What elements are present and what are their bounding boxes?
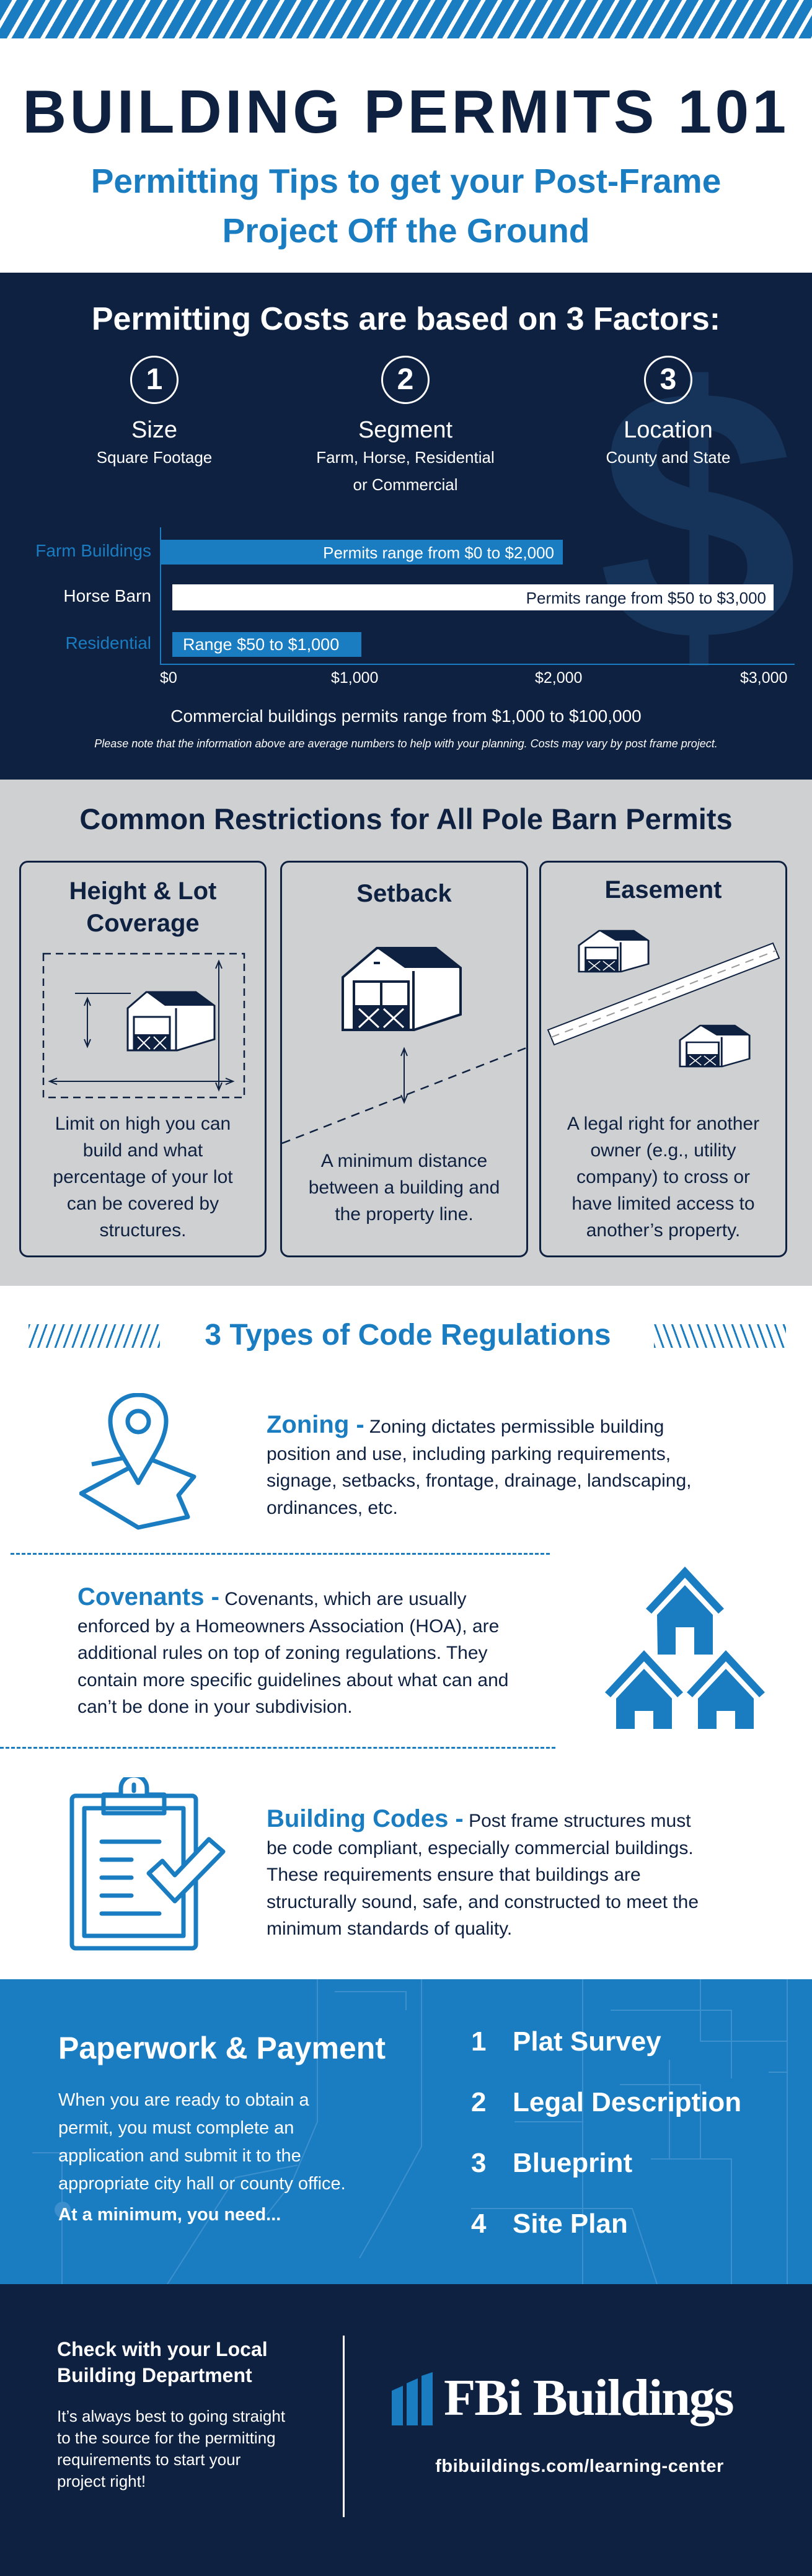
subtitle: Project Off the Ground <box>223 211 589 250</box>
top stripe band <box>0 0 812 38</box>
list: requirements: Site Plan <box>513 2209 628 2239</box>
text: footer description: requirements to start your <box>57 2450 241 2469</box>
card: height & lot coverage: Height & Lot <box>69 877 216 905</box>
bar: residential: Range $50 to $1,000 <box>183 635 339 654</box>
factor 2: segment <box>316 356 495 494</box>
icon: logo bars <box>392 2372 433 2425</box>
text: paperwork description: At a minimum, you need... <box>58 2205 281 2225</box>
item 3 <box>471 2148 632 2178</box>
text: easement description: A legal right for another <box>567 1114 759 1134</box>
text: building codes: structurally sound, safe, and constructed to meet the <box>267 1891 699 1912</box>
text: zoning: Zoning - Zoning dictates permissible building <box>267 1411 664 1438</box>
text: zoning: signage, setbacks, frontage, drainage, landscaping, <box>267 1470 691 1491</box>
text: paperwork description: When you are ready to obtain a <box>58 2090 309 2110</box>
icon: clipboard <box>69 1777 226 1951</box>
text: zoning: ordinances, etc. <box>267 1497 398 1518</box>
bar: horse barn: Permits range from $50 to $3,000 <box>526 589 766 607</box>
url: fbibuildings.com/learning-center <box>435 2456 724 2476</box>
item 3: 3 <box>471 2148 486 2178</box>
icon: easement diagram <box>547 930 780 1067</box>
list: requirements: Plat Survey <box>513 2026 661 2057</box>
list: requirements: Blueprint <box>513 2148 632 2178</box>
text: zoning: position and use, including parking requirements, <box>267 1444 671 1464</box>
heading: check with local department: Check with your Local <box>57 2338 268 2360</box>
text: height description: Limit on high you can <box>55 1114 231 1134</box>
list: requirements <box>471 2026 741 2239</box>
heading: 3 factors: Permitting Costs are based on 3 Factors: <box>92 301 720 337</box>
text: setback description: the property line. <box>335 1204 474 1224</box>
bar chart: $0 <box>160 669 177 687</box>
panel: common restrictions <box>0 780 812 1286</box>
icon: map pin <box>79 1393 196 1529</box>
text: paperwork description <box>58 2090 346 2225</box>
commercial note: Commercial buildings permits range from $1,000 to $100,000 <box>170 706 642 726</box>
text: height description: percentage of your lot <box>53 1167 233 1187</box>
heading: 3 types of code regulations: 3 Types of Code Regulations <box>205 1319 611 1352</box>
bar chart <box>35 527 795 687</box>
text: setback description: between a building and <box>309 1177 500 1198</box>
text: easement description: have limited access to <box>571 1193 755 1214</box>
subtitle <box>91 162 721 250</box>
item 4 <box>471 2209 628 2239</box>
text: building codes: be code compliant, especially commercial buildings. <box>267 1838 694 1858</box>
bar chart: $3,000 <box>740 669 787 687</box>
factor 2: segment: or Commercial <box>353 475 458 494</box>
factor 1: size: 1 <box>146 363 162 396</box>
subtitle: Permitting Tips to get your Post-Frame <box>91 162 721 200</box>
text: footer description: to the source for the permitting <box>57 2429 276 2447</box>
heading: common restrictions: Common Restrictions for All Pole Barn Permits <box>79 802 733 835</box>
factor 3: location <box>606 356 730 467</box>
text: footer description: project right! <box>57 2472 146 2490</box>
text: building codes: These requirements ensure that buildings are <box>267 1865 641 1885</box>
list: requirements: Legal Description <box>513 2087 741 2117</box>
factor 2: segment: Farm, Horse, Residential <box>316 448 495 467</box>
factor 1: size: Square Footage <box>97 448 212 467</box>
item 1 <box>471 2026 661 2057</box>
icon: houses <box>605 1567 765 1729</box>
text: footer description <box>57 2407 285 2490</box>
panel: permitting costs <box>0 273 812 781</box>
bar: farm buildings: Permits range from $0 to $2,000 <box>323 543 554 562</box>
text: covenants: enforced by a Homeowners Association (HOA), are <box>77 1616 499 1636</box>
text: height description <box>53 1114 233 1241</box>
text: zoning <box>267 1411 691 1518</box>
card: height & lot coverage: Coverage <box>86 910 200 937</box>
text: covenants: can’t be done in your subdivision. <box>77 1697 353 1717</box>
text: easement description: owner (e.g., utility <box>590 1140 736 1161</box>
panel: footer <box>0 2284 812 2576</box>
text: easement description: company) to cross or <box>576 1167 750 1187</box>
text: building codes <box>267 1805 699 1939</box>
text: building codes: Building Codes - Post frame structures must <box>267 1805 691 1832</box>
factor 3: location: Location <box>624 417 713 443</box>
text: paperwork description: permit, you must complete an <box>58 2118 294 2138</box>
text: easement description: another’s property. <box>586 1220 740 1241</box>
bar: residential <box>65 632 361 657</box>
icon: big dollar sign: $ <box>598 314 798 715</box>
bar: horse barn: Horse Barn <box>63 586 151 605</box>
factor 2: segment: Segment <box>358 417 452 443</box>
factor 3: location: 3 <box>660 363 676 396</box>
text: setback description: A minimum distance <box>321 1151 487 1171</box>
card: setback <box>280 861 528 1257</box>
heading: 3 types of code regulations <box>29 1319 786 1352</box>
text: covenants <box>77 1583 508 1717</box>
factor 3: location: County and State <box>606 448 730 467</box>
text: covenants: Covenants - Covenants, which are usually <box>77 1583 466 1611</box>
heading: check with local department <box>57 2338 268 2386</box>
text: footer description: It’s always best to going straight <box>57 2407 285 2425</box>
logo: FBi Buildings: FBi Buildings <box>444 2369 733 2427</box>
disclaimer: Please note that the information above are average numbers to help with your planning. Costs may vary by post frame project. <box>94 737 718 750</box>
card: setback: Setback <box>356 880 452 907</box>
card: height & lot coverage <box>19 861 267 1257</box>
bar: farm buildings: Farm Buildings <box>35 541 151 560</box>
factor 1: size: Size <box>131 417 177 443</box>
factor 2: segment: 2 <box>397 363 413 396</box>
bar chart: $1,000 <box>331 669 378 687</box>
text: setback description <box>309 1151 500 1224</box>
text: covenants: additional rules on top of zoning regulations. They <box>77 1643 488 1663</box>
heading: paperwork & payment: Paperwork & Payment <box>58 2031 386 2065</box>
title: BUILDING PERMITS 101 <box>22 77 790 146</box>
card: easement: Easement <box>605 876 722 903</box>
axis labels <box>160 669 787 687</box>
panel: paperwork & payment <box>0 1979 812 2284</box>
bar: horse barn <box>63 584 774 610</box>
bar: farm buildings <box>35 540 563 565</box>
icon: lot diagram <box>42 953 245 1098</box>
item 4: 4 <box>471 2209 486 2239</box>
text: paperwork description: application and submit it to the <box>58 2146 301 2166</box>
bar: residential: Residential <box>65 633 151 653</box>
factor 1: size <box>97 356 212 467</box>
text: paperwork description: appropriate city hall or county office. <box>58 2174 346 2194</box>
text: height description: structures. <box>99 1220 187 1241</box>
text: height description: build and what <box>83 1140 203 1161</box>
blueprint background lines <box>32 1979 788 2284</box>
bar chart: $2,000 <box>535 669 582 687</box>
item 2 <box>471 2087 741 2117</box>
card: easement <box>539 861 787 1257</box>
text: building codes: minimum standards of quality. <box>267 1919 512 1939</box>
heading: check with local department: Building Department <box>57 2364 252 2386</box>
text: height description: can be covered by <box>67 1193 219 1214</box>
text: easement description <box>567 1114 759 1241</box>
item 2: 2 <box>471 2087 486 2117</box>
text: covenants: contain more specific guidelines about what can and <box>77 1669 508 1690</box>
item 1: 1 <box>471 2026 486 2057</box>
icon: setback diagram <box>282 947 526 1144</box>
